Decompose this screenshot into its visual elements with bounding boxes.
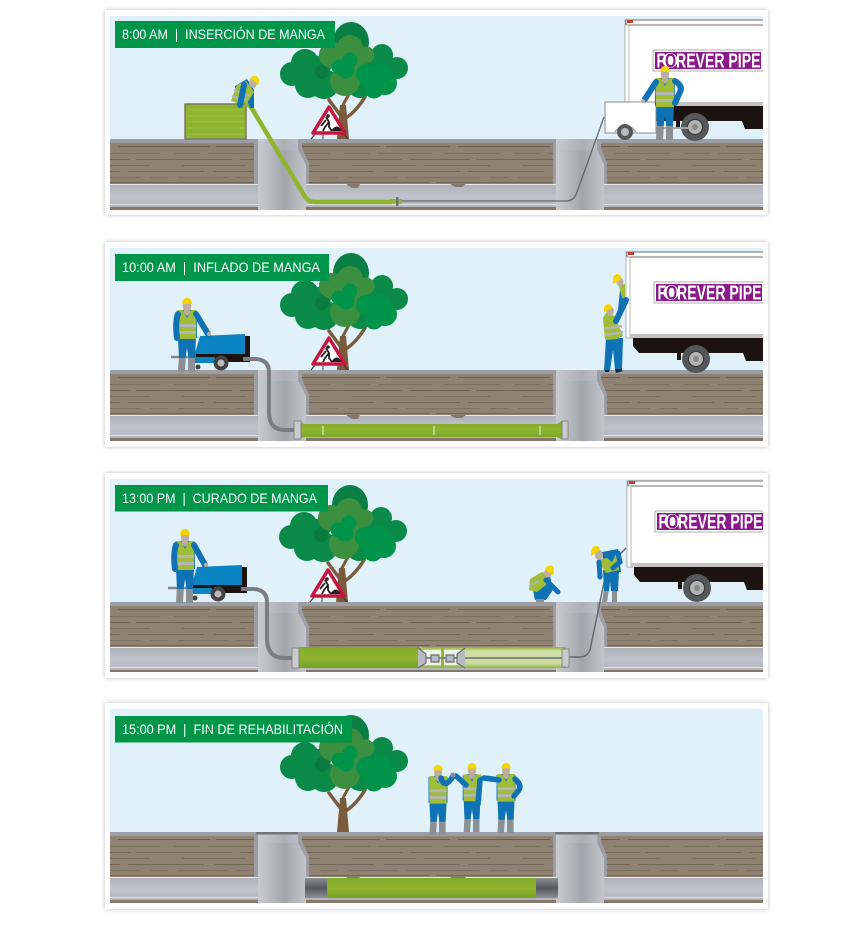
ground cross-section with manholes and pipe: [110, 602, 763, 673]
air compressor: [171, 334, 250, 370]
worker at compressor: [174, 529, 208, 603]
winch cable from trailer: [398, 117, 604, 201]
worker beside trailer: [641, 66, 681, 140]
ground cross-section with manholes and pipe: [110, 370, 763, 441]
worker at compressor: [176, 298, 211, 372]
panel: 10:00 AM sleeve inflation: [105, 242, 774, 447]
title: 15:00 PM: [115, 716, 352, 742]
manhole lids: [256, 832, 599, 834]
inflated green sleeve: [294, 421, 568, 439]
tree: [280, 715, 408, 832]
title: 10:00 AM: 10:00 AM | INFLADO DE MANGA: [122, 259, 321, 275]
green sleeve entering the pipe: [245, 104, 392, 202]
warning sign: [311, 107, 348, 139]
control cable: [570, 548, 626, 657]
title: 13:00 PM: 13:00 PM | CURADO DE MANGA: [122, 490, 318, 506]
tree: [279, 485, 407, 602]
panel: 13:00 PM sleeve curing: [105, 473, 775, 678]
worker holding cable: [591, 546, 621, 602]
truck with Forever Pipe logo: FOREVER PIPE: [656, 50, 760, 72]
rehabilitated pipe section: [305, 878, 558, 898]
truck with Forever Pipe logo: FOREVER PIPE: [658, 282, 762, 304]
truck with Forever Pipe logo: [627, 481, 775, 602]
cable connector: [390, 197, 402, 206]
air compressor: [168, 565, 247, 602]
ground cross-section with manholes and pipe: [110, 832, 763, 903]
truck with Forever Pipe logo: [626, 252, 774, 373]
panel: 15:00 PM rehabilitation complete: [105, 703, 768, 909]
stacked sleeve on box: [185, 104, 246, 139]
panel: 8:00 AM sleeve insertion: [105, 10, 773, 215]
air hose: [243, 359, 294, 430]
three celebrating workers: [428, 763, 520, 835]
title: 8:00 AM: 8:00 AM | INSERCIÓN DE MANGA: [122, 26, 326, 42]
title: 10:00 AM: [115, 254, 329, 281]
worker bending over the box: [231, 76, 259, 108]
curing sleeve with robot: [292, 647, 569, 668]
warning sign: [310, 570, 347, 602]
title: 13:00 PM: [115, 485, 328, 512]
truck with Forever Pipe logo: FOREVER PIPE: [658, 512, 762, 534]
trailer: [605, 102, 688, 140]
title: 8:00 AM: [115, 21, 335, 48]
ground cross-section with manholes and pipe: [110, 139, 763, 210]
tree: [280, 22, 408, 139]
warning sign: [311, 338, 348, 370]
worker standing by truck: [603, 300, 626, 373]
truck with Forever Pipe logo: [625, 20, 773, 141]
crouching worker: [529, 566, 558, 602]
worker climbing truck: [613, 274, 625, 310]
tree: [280, 253, 408, 370]
title: 15:00 PM: 15:00 PM | FIN DE REHABILITACIÓN: [122, 721, 343, 737]
steam hose: [241, 589, 293, 658]
